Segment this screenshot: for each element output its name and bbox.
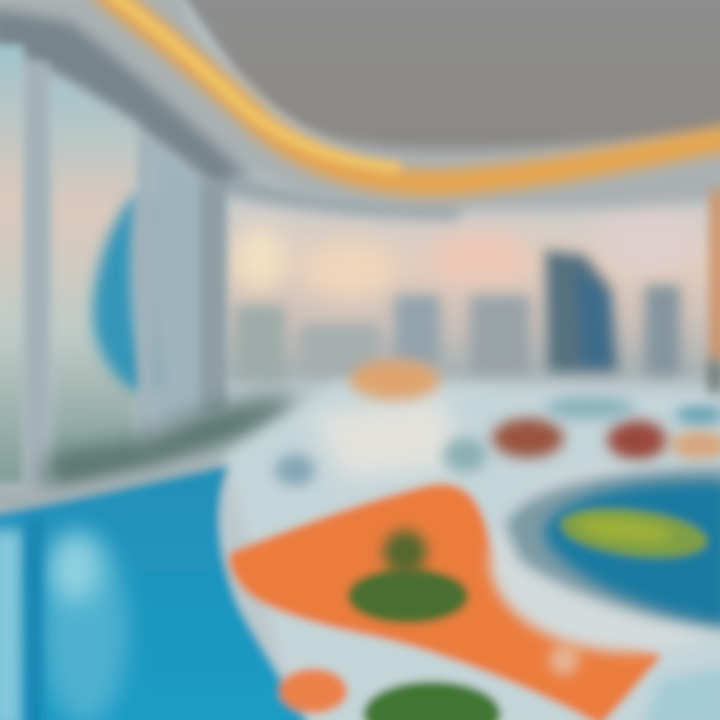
lower right floor corner xyxy=(640,665,720,720)
blue curved tower xyxy=(93,190,150,395)
round pool, right side xyxy=(490,468,720,652)
lounge furniture xyxy=(275,360,720,486)
small pale circle on orange xyxy=(549,645,579,675)
orange floor shape xyxy=(230,484,662,720)
right edge column xyxy=(710,190,720,360)
blue pool, bottom left xyxy=(0,466,312,720)
panorama window with sky xyxy=(215,190,720,380)
planters along window xyxy=(45,395,300,495)
green circle at bottom xyxy=(364,682,500,720)
small orange circle xyxy=(279,669,347,713)
pool reflections xyxy=(0,520,127,720)
window columns xyxy=(24,62,226,492)
orange cove light band xyxy=(106,0,720,183)
left windows xyxy=(0,45,225,485)
green planter island xyxy=(348,530,468,623)
terrace floor xyxy=(225,382,720,720)
ceiling xyxy=(178,0,720,160)
beam under ceiling xyxy=(0,0,720,211)
city skyline xyxy=(235,250,680,380)
